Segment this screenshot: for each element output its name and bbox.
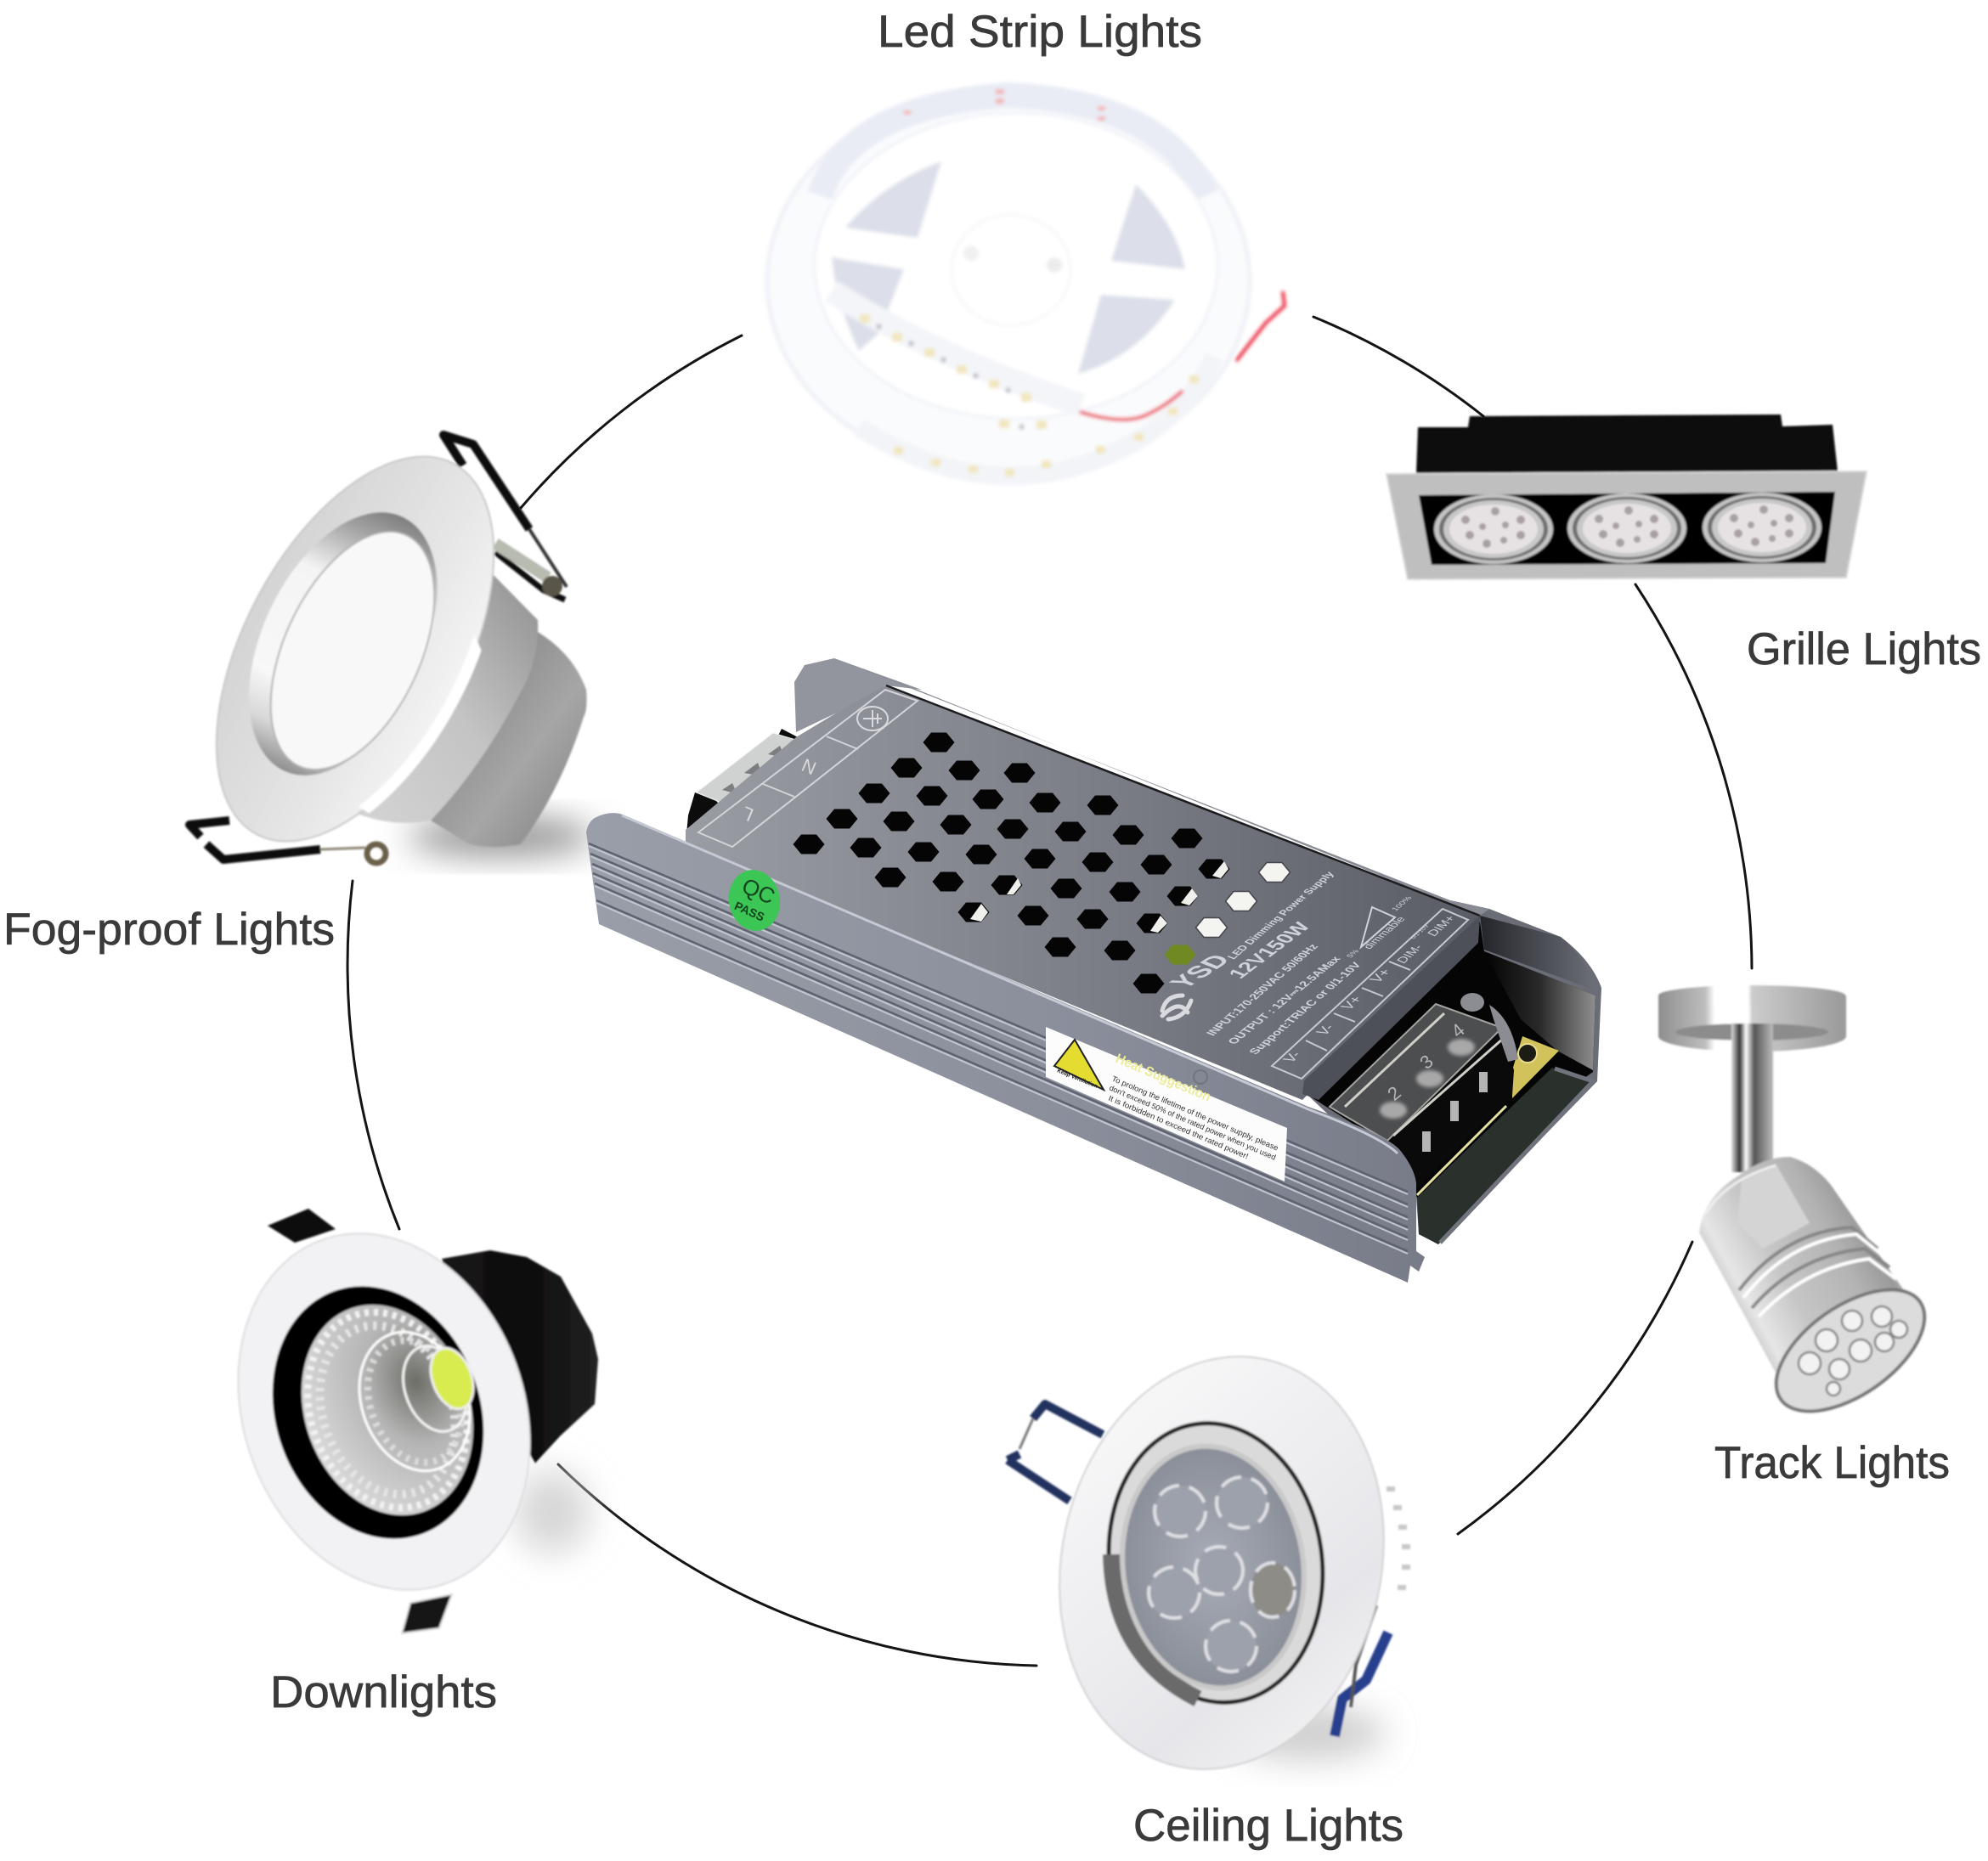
downlight bottom tab <box>402 1594 452 1633</box>
PCB yellow edge <box>1417 1106 1506 1195</box>
terminal labels: DIM+ <box>1424 913 1458 938</box>
strip red markers <box>904 89 1105 121</box>
fog-proof front body <box>351 572 538 823</box>
ceiling opening <box>1091 1409 1341 1717</box>
terminal labels <box>1279 913 1458 1065</box>
green-lit hole <box>1164 945 1196 965</box>
fog-proof face ring <box>159 412 551 886</box>
terminal numbers: 3 <box>1415 1051 1437 1074</box>
product: downlight <box>236 1208 616 1634</box>
downlight reflector <box>273 1280 502 1540</box>
ceiling lens <box>1107 1435 1319 1700</box>
ceiling ring <box>1022 1326 1421 1800</box>
track head lens <box>1755 1266 1946 1435</box>
fog-proof rear body <box>431 632 587 847</box>
ceiling fins <box>1387 1486 1410 1590</box>
brand and specs text: OUTPUT : 12V⎓12.5AMax <box>1225 955 1344 1046</box>
downlight COB chip <box>423 1342 481 1415</box>
dimming triangle <box>1361 907 1395 947</box>
track upper facet <box>1737 1164 1810 1249</box>
brand and specs text: Support:TRIAC or 0/1-10V <box>1246 961 1364 1056</box>
inner wall <box>1484 951 1595 1070</box>
warning body text: It is forbidden to exceed the rated power! <box>1107 1094 1250 1160</box>
product: grille light <box>1387 414 1867 579</box>
outer flange <box>1308 900 1601 1244</box>
terminal clear cover <box>1330 1004 1502 1141</box>
reel windows <box>832 161 1185 374</box>
terminal numbers <box>1383 1019 1469 1105</box>
terminal labels: DIM- <box>1393 943 1425 965</box>
left terminal legend table <box>698 690 918 847</box>
warning triangle <box>1054 1040 1104 1090</box>
lamp 2 <box>1567 493 1686 563</box>
interior black <box>1302 922 1595 1198</box>
brand and specs text: YSD <box>1162 950 1237 992</box>
connecting circle arcs <box>347 317 1752 1666</box>
output terminal table <box>1272 909 1468 1079</box>
fog-proof shadow <box>408 818 595 855</box>
plate edge shadow <box>886 685 1480 916</box>
terminal labels: V+ <box>1337 994 1366 1012</box>
warning heading: Heat Suggestion <box>1113 1052 1213 1105</box>
lamp 1 <box>1434 494 1553 564</box>
upper inner band <box>1480 916 1598 991</box>
side ridges <box>589 843 1408 1254</box>
track LED cluster <box>1799 1306 1907 1396</box>
label: Track Lights: Track Lights <box>1714 1438 1950 1488</box>
warning label: Keep Ventilation <box>1056 1068 1098 1090</box>
terminal labels: V+ <box>1366 967 1395 985</box>
left flange <box>794 658 922 732</box>
ventilation holes <box>794 732 1230 994</box>
warning body text: don't exceed 50% of the rated power when you used <box>1108 1084 1277 1162</box>
downlight shadow <box>514 1469 590 1554</box>
terminal screws <box>1422 1072 1488 1152</box>
top lip highlight <box>622 815 1398 1153</box>
track cylinder <box>1699 1157 1923 1393</box>
downlight ring <box>189 1193 579 1631</box>
terminal labels: V- <box>1313 1022 1338 1038</box>
downlight heat sink <box>442 1250 598 1463</box>
grille housing <box>1416 414 1838 473</box>
inner LED run <box>832 291 1082 405</box>
ceiling LEDs <box>1149 1477 1295 1672</box>
brand and specs text: 12V150W <box>1224 919 1316 981</box>
track base disc <box>1658 995 1846 1052</box>
strip outer coil <box>767 87 1250 475</box>
terminal nubs <box>1460 993 1518 1062</box>
PCB hole <box>1518 1044 1537 1063</box>
label: Ceiling Lights: Ceiling Lights <box>1133 1801 1403 1851</box>
reel hub <box>952 215 1070 325</box>
downlight black bezel <box>238 1256 518 1569</box>
product: LED strip reel <box>767 87 1285 477</box>
QC pass sticker: PASS <box>732 899 767 924</box>
brand and specs text: dimmable <box>1360 915 1408 950</box>
yellow PCB <box>1512 1036 1559 1098</box>
QC pass sticker: QC <box>738 872 779 910</box>
fog-proof white edge band <box>359 637 483 814</box>
terminal numbers: 2 <box>1383 1082 1405 1105</box>
right terminal block <box>1330 993 1518 1189</box>
brand logo <box>1162 995 1191 1019</box>
rear thin flange <box>834 658 1489 916</box>
track stem <box>1731 1024 1773 1172</box>
label: Led Strip Lights: Led Strip Lights <box>878 7 1202 57</box>
terminal labels: 0/1-10V <box>1409 924 1431 940</box>
labels L N <box>738 754 819 826</box>
brand and specs text: 5% <box>1345 949 1361 959</box>
labels L N: L <box>738 802 756 826</box>
red wires <box>1080 391 1183 420</box>
label: Downlights: Downlights <box>270 1667 497 1717</box>
partial hole highlights <box>970 861 1228 933</box>
terminal cover screws <box>1380 1039 1475 1119</box>
downlight top tab <box>268 1209 336 1243</box>
rivet <box>1194 1070 1207 1084</box>
fog-proof bracket top <box>443 435 567 600</box>
bottom wall <box>1417 1068 1591 1244</box>
fog-proof lens <box>237 506 468 795</box>
product: ceiling light <box>1008 1326 1421 1800</box>
product: track light <box>1658 985 1946 1435</box>
fog-proof silver ring <box>211 482 476 805</box>
brand and specs text: INPUT:170-250VAC 50/60Hz <box>1204 943 1321 1037</box>
side panel <box>586 813 1425 1283</box>
plate front lip <box>1302 916 1480 1100</box>
central product: LED dimming power supply <box>586 658 1601 1283</box>
label: Grille Lights: Grille Lights <box>1747 624 1981 674</box>
terminal labels: V- <box>1279 1049 1305 1065</box>
ceiling shadow <box>1232 1706 1385 1760</box>
terminal numbers: 4 <box>1447 1019 1469 1042</box>
product: fog-proof light <box>184 429 600 874</box>
right end interior <box>1302 900 1601 1244</box>
left terminal block <box>686 729 801 837</box>
grille frame <box>1387 471 1867 579</box>
warning label <box>1046 1027 1287 1181</box>
ground symbol <box>857 707 888 730</box>
brand and specs text <box>1162 870 1414 1056</box>
see-through holes <box>1196 863 1290 938</box>
grille opening <box>1419 492 1835 565</box>
QC pass sticker <box>724 866 785 935</box>
lamp 3 <box>1703 493 1821 562</box>
top cover plate <box>686 685 1480 1100</box>
track grooves <box>1739 1227 1896 1317</box>
ceiling clip <box>1008 1404 1103 1501</box>
reel disc <box>815 113 1217 419</box>
brand and specs text: 100% <box>1390 895 1414 912</box>
fog-proof bracket bottom <box>189 821 386 863</box>
label: Fog-proof Lights: Fog-proof Lights <box>3 905 335 955</box>
warning body text: To prolong the lifetime of the power supply, please <box>1110 1074 1279 1153</box>
outer LED run <box>859 357 1215 476</box>
brand and specs text: LED Dimming Power Supply <box>1224 870 1337 961</box>
ceiling spring clip <box>1335 1605 1388 1736</box>
terminal black base <box>1387 1028 1514 1189</box>
labels L N: N <box>799 754 819 779</box>
